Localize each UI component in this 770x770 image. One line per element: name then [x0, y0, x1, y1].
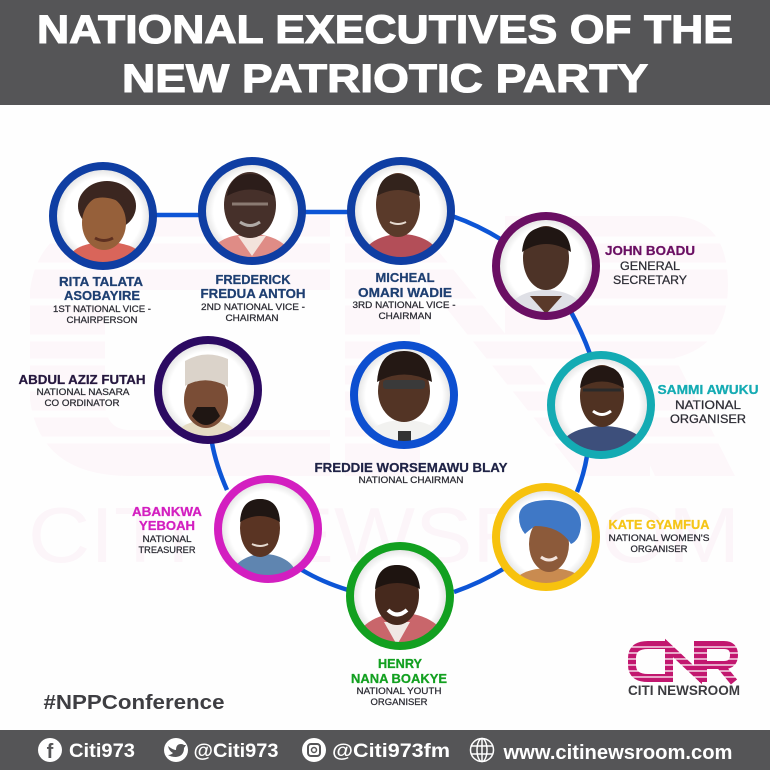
label: Abankwa Yeboah: TREASURER	[138, 545, 196, 556]
portrait: Frederick Fredua Antoh	[202, 161, 302, 278]
label: John Boadu	[605, 243, 695, 287]
watermark: CNR and Citi Newsroom	[20, 216, 740, 579]
label: Henry Nana Boakye: NANA BOAKYE	[351, 671, 447, 686]
label: Abdul Aziz Futah	[18, 372, 146, 409]
label: Henry Nana Boakye	[351, 656, 447, 708]
label: Kate Gyamfua: KATE GYAMFUA	[608, 517, 710, 532]
label: John Boadu: SECRETARY	[613, 273, 687, 287]
footer: Twitter: @Citi973	[194, 741, 278, 762]
footer: Facebook	[38, 738, 135, 763]
footer band	[0, 730, 770, 770]
watermark: CNR and Citi Newsroom: CITI NEWSROOM	[28, 491, 740, 579]
label: Sammi Awuku: SAMMI AWUKU	[658, 382, 758, 397]
portrait: John Boadu	[496, 216, 596, 334]
label: Henry Nana Boakye: ORGANISER	[370, 697, 428, 708]
label: Abdul Aziz Futah: NATIONAL NASARA	[36, 387, 130, 398]
label: Kate Gyamfua: NATIONAL WOMEN'S	[608, 533, 710, 544]
label: Freddie Worsemawu Blay: FREDDIE WORSEMAWU BLAY	[314, 460, 508, 475]
label: Frederick Fredua Antoh: FREDUA ANTOH	[200, 286, 306, 301]
label: Micheal Omari Wadie: CHAIRMAN	[378, 311, 432, 322]
label: Sammi Awuku: NATIONAL	[675, 398, 741, 412]
footer: website: www.citinewsroom.com	[502, 742, 732, 764]
label: Abankwa Yeboah: YEBOAH	[139, 518, 195, 533]
label: Abdul Aziz Futah: ABDUL AZIZ FUTAH	[18, 372, 146, 387]
portrait: Henry Nana Boakye	[346, 542, 454, 650]
label: Rita Talata Asobayire: RITA TALATA	[59, 274, 144, 289]
header band	[0, 0, 770, 105]
label: Freddie Worsemawu Blay: NATIONAL CHAIRMAN	[358, 475, 464, 486]
label: Kate Gyamfua	[608, 517, 710, 555]
logo: CNR Citi Newsroom	[625, 641, 742, 698]
label: Kate Gyamfua: ORGANISER	[630, 544, 688, 555]
footer: Instagram: @Citi973fm	[332, 741, 450, 762]
label: Rita Talata Asobayire: 1ST NATIONAL VICE -	[53, 304, 151, 315]
label: Micheal Omari Wadie: OMARI WADIE	[358, 285, 452, 300]
label: Sammi Awuku	[658, 382, 758, 426]
portrait: Abdul Aziz Futah	[158, 340, 258, 452]
label: Frederick Fredua Antoh: 2ND NATIONAL VICE -	[201, 302, 305, 313]
label: Abdul Aziz Futah: CO ORDINATOR	[44, 398, 120, 409]
portrait: Abankwa Yeboah	[218, 479, 318, 602]
label: Rita Talata Asobayire	[53, 274, 151, 326]
label: Frederick Fredua Antoh: CHAIRMAN	[226, 313, 279, 324]
label: Micheal Omari Wadie	[352, 270, 456, 322]
label: Frederick Fredua Antoh: FREDERICK	[216, 272, 291, 287]
label: John Boadu: GENERAL	[620, 259, 680, 273]
footer: Facebook: Citi973	[69, 741, 135, 762]
label: John Boadu: JOHN BOADU	[605, 243, 695, 258]
label: Frederick Fredua Antoh	[200, 272, 306, 324]
label: Henry Nana Boakye: NATIONAL YOUTH	[356, 686, 442, 697]
logo: CNR Citi Newsroom: CITI NEWSROOM	[628, 683, 740, 698]
portrait: Micheal Omari Wadie	[351, 161, 451, 282]
label: Henry Nana Boakye: HENRY	[378, 656, 422, 671]
label: Rita Talata Asobayire: CHAIRPERSON	[66, 315, 138, 326]
label: Freddie Worsemawu Blay	[314, 460, 508, 486]
label: Rita Talata Asobayire: ASOBAYIRE	[64, 288, 140, 303]
footer: Twitter	[164, 738, 278, 762]
portrait: Rita Talata Asobayire	[53, 166, 153, 274]
title	[37, 8, 733, 101]
label: Abankwa Yeboah	[132, 504, 203, 556]
label: Abankwa Yeboah: ABANKWA	[132, 504, 203, 519]
portrait: Sammi Awuku	[551, 355, 651, 474]
label: Micheal Omari Wadie: 3RD NATIONAL VICE -	[352, 300, 456, 311]
label: Abankwa Yeboah: NATIONAL	[142, 534, 192, 545]
title: NEW PATRIOTIC PARTY	[122, 57, 648, 101]
portrait: Freddie Worsemawu Blay	[354, 345, 454, 464]
footer: Instagram	[302, 738, 450, 762]
connecting ring line	[155, 212, 590, 592]
title: NATIONAL EXECUTIVES OF THE	[37, 8, 733, 52]
hashtag: #NPPConference	[44, 692, 224, 714]
footer: Facebook: f	[47, 741, 54, 763]
portrait: Kate Gyamfua	[496, 487, 596, 602]
label: Micheal Omari Wadie: MICHEAL	[376, 270, 435, 285]
label: Sammi Awuku: ORGANISER	[670, 412, 746, 426]
